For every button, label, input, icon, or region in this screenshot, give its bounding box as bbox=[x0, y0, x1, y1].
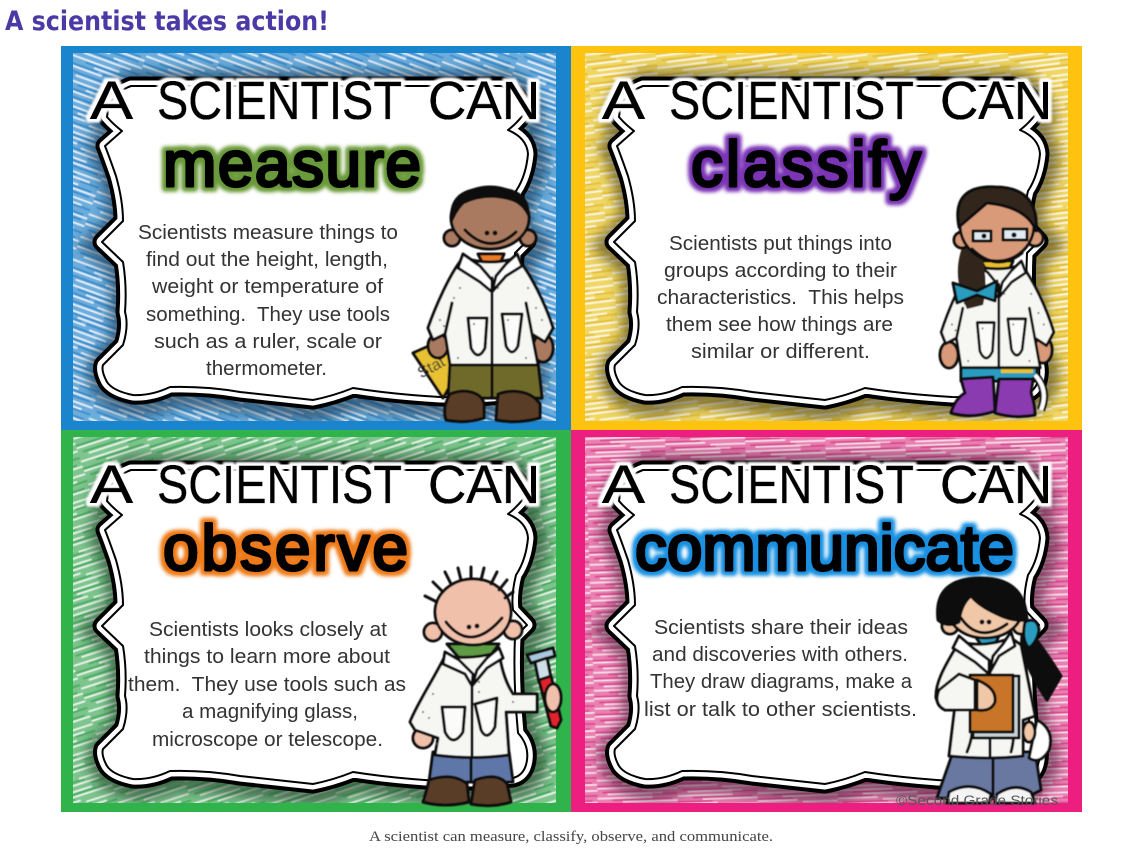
text block: measure: thermometer. bbox=[206, 358, 327, 380]
caption: A scientist can measure, classify, observe, and communicate. bbox=[369, 829, 773, 845]
text block: classify: characteristics. This helps bbox=[657, 287, 904, 309]
frame: measure bbox=[102, 86, 528, 400]
frame: communicate bbox=[614, 470, 1040, 784]
text block: communicate: list or talk to other scientists. bbox=[644, 699, 917, 721]
icon: yellow folder bbox=[413, 338, 460, 398]
text block: measure bbox=[138, 222, 398, 380]
text block: measure: find out the height, length, bbox=[146, 249, 388, 271]
text block: communicate: and discoveries with others. bbox=[652, 644, 908, 666]
heading: communicate: CAN bbox=[940, 455, 1052, 515]
icon: blue bow bbox=[953, 281, 997, 303]
character: boy with dark skin and folder bbox=[413, 187, 553, 422]
character: girl with ponytail and book bbox=[936, 578, 1061, 803]
character: girl with glasses and braid bbox=[940, 187, 1054, 417]
panel: communicate bbox=[571, 430, 1082, 812]
heading: communicate: A bbox=[602, 455, 645, 515]
text block: observe bbox=[128, 619, 406, 751]
text block: classify: Scientists put things into bbox=[669, 233, 892, 255]
heading: communicate: SCIENTIST bbox=[669, 455, 914, 515]
heading: observe: SCIENTIST bbox=[157, 455, 402, 515]
word: communicate: communicate bbox=[635, 512, 1014, 584]
text block: communicate bbox=[644, 617, 917, 721]
icon: test tube bbox=[527, 648, 561, 728]
heading: classify: CAN bbox=[940, 71, 1052, 131]
text block: classify: them see how things are bbox=[666, 314, 893, 336]
text block: observe: a magnifying glass, bbox=[182, 701, 358, 723]
frame: observe bbox=[102, 470, 528, 784]
panel: measure bbox=[61, 46, 571, 430]
text block: measure: such as a ruler, scale or bbox=[154, 331, 382, 353]
text block: measure: something. They use tools bbox=[146, 304, 390, 326]
heading: classify bbox=[602, 71, 1052, 131]
title: A scientist takes action! bbox=[5, 6, 329, 37]
frame: classify bbox=[614, 86, 1040, 400]
text block: measure: Scientists measure things to bbox=[138, 222, 398, 244]
text block: observe: Scientists looks closely at bbox=[149, 619, 387, 641]
text block: observe: them. They use tools such as bbox=[128, 674, 406, 696]
heading: measure: A bbox=[90, 71, 133, 131]
heading: classify: A bbox=[602, 71, 645, 131]
text block: communicate: They draw diagrams, make a bbox=[650, 671, 913, 693]
credit: communicate: ©Second Grade Stories bbox=[896, 793, 1058, 808]
heading: communicate bbox=[602, 455, 1052, 515]
text block: observe: things to learn more about bbox=[144, 646, 390, 668]
heading: measure: SCIENTIST bbox=[157, 71, 402, 131]
word: observe: observe bbox=[163, 512, 408, 584]
text block: observe: microscope or telescope. bbox=[152, 729, 383, 751]
icon: orange book bbox=[970, 675, 1019, 738]
text block: classify bbox=[657, 233, 904, 363]
text block: classify: groups according to their bbox=[664, 260, 897, 282]
text block: communicate: Scientists share their ideas bbox=[654, 617, 908, 639]
heading: measure: CAN bbox=[428, 71, 540, 131]
panel: observe bbox=[61, 430, 571, 812]
icon: yellow folder: Stat bbox=[415, 353, 449, 382]
panel: classify bbox=[571, 46, 1082, 430]
character: bald boy with test tube bbox=[410, 567, 561, 806]
heading: observe bbox=[90, 455, 540, 515]
word: classify: classify bbox=[691, 128, 921, 200]
text block: classify: similar or different. bbox=[691, 341, 870, 363]
heading: measure bbox=[90, 71, 540, 131]
heading: observe: A bbox=[90, 455, 133, 515]
heading: classify: SCIENTIST bbox=[669, 71, 914, 131]
word: measure: measure bbox=[163, 128, 421, 200]
heading: observe: CAN bbox=[428, 455, 540, 515]
text block: measure: weight or temperature of bbox=[151, 276, 383, 298]
